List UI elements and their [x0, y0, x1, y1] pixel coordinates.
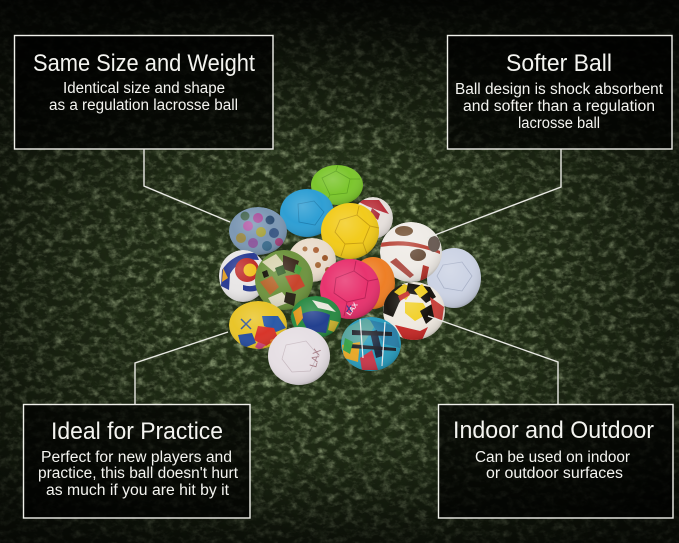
panel: same size and weight: [14, 36, 273, 149]
ball: beige pattern: [288, 238, 336, 282]
panel: ideal for practice: [24, 404, 250, 518]
text block: practice, this ball doesn't hurt: [38, 465, 239, 482]
heading: Indoor and Outdoor: [453, 417, 654, 444]
ball: Colorado flag: [219, 250, 262, 302]
ball: plaid: [341, 317, 401, 371]
text block: and softer than a regulation: [463, 98, 655, 115]
ball: multicolor blue and green: [291, 296, 341, 338]
text block: [49, 80, 238, 114]
connector: softer ball: [427, 149, 561, 238]
ball: pink: [320, 259, 380, 319]
ball: white bottom: LAX: [308, 347, 324, 369]
ball: puzzle pattern yellow: [229, 301, 287, 350]
text block: [455, 81, 664, 132]
panel: softer ball: [448, 36, 672, 149]
heading: Same Size and Weight: [33, 50, 255, 77]
panel: indoor and outdoor: [438, 404, 673, 518]
connector: indoor and outdoor: [428, 316, 558, 404]
ball: red and white back: [358, 197, 393, 238]
ball: white grey: [427, 248, 481, 308]
text block: as much if you are hit by it: [46, 482, 230, 499]
ball: pink: LAX: [346, 301, 360, 317]
ball: pink: X: [346, 304, 352, 314]
heading: Softer Ball: [506, 50, 612, 77]
ball: California flag: [380, 222, 442, 282]
ball: orange: [351, 257, 395, 309]
connector: ideal for practice: [135, 332, 228, 404]
ball: camouflage: [255, 250, 313, 310]
text block: as a regulation lacrosse ball: [49, 97, 238, 114]
text block: Can be used on indoor: [475, 449, 630, 466]
text block: [38, 449, 239, 499]
ball: sky blue: [280, 189, 334, 237]
text block: Ball design is shock absorbent: [455, 81, 664, 98]
text block: lacrosse ball: [518, 115, 600, 132]
ball: yellow: [321, 203, 379, 259]
heading: Ideal for Practice: [51, 418, 223, 445]
ball: lime green: [311, 165, 363, 205]
text block: Identical size and shape: [63, 80, 225, 97]
ball: blue pattern with circles: [229, 207, 287, 255]
connector: same size and weight: [144, 149, 230, 222]
ball: white bottom: [268, 327, 330, 385]
ball: Maryland flag: [383, 282, 445, 340]
text block: or outdoor surfaces: [486, 465, 623, 482]
pile of lacrosse balls: [219, 165, 481, 385]
text block: [475, 449, 630, 482]
text block: Perfect for new players and: [41, 449, 232, 466]
